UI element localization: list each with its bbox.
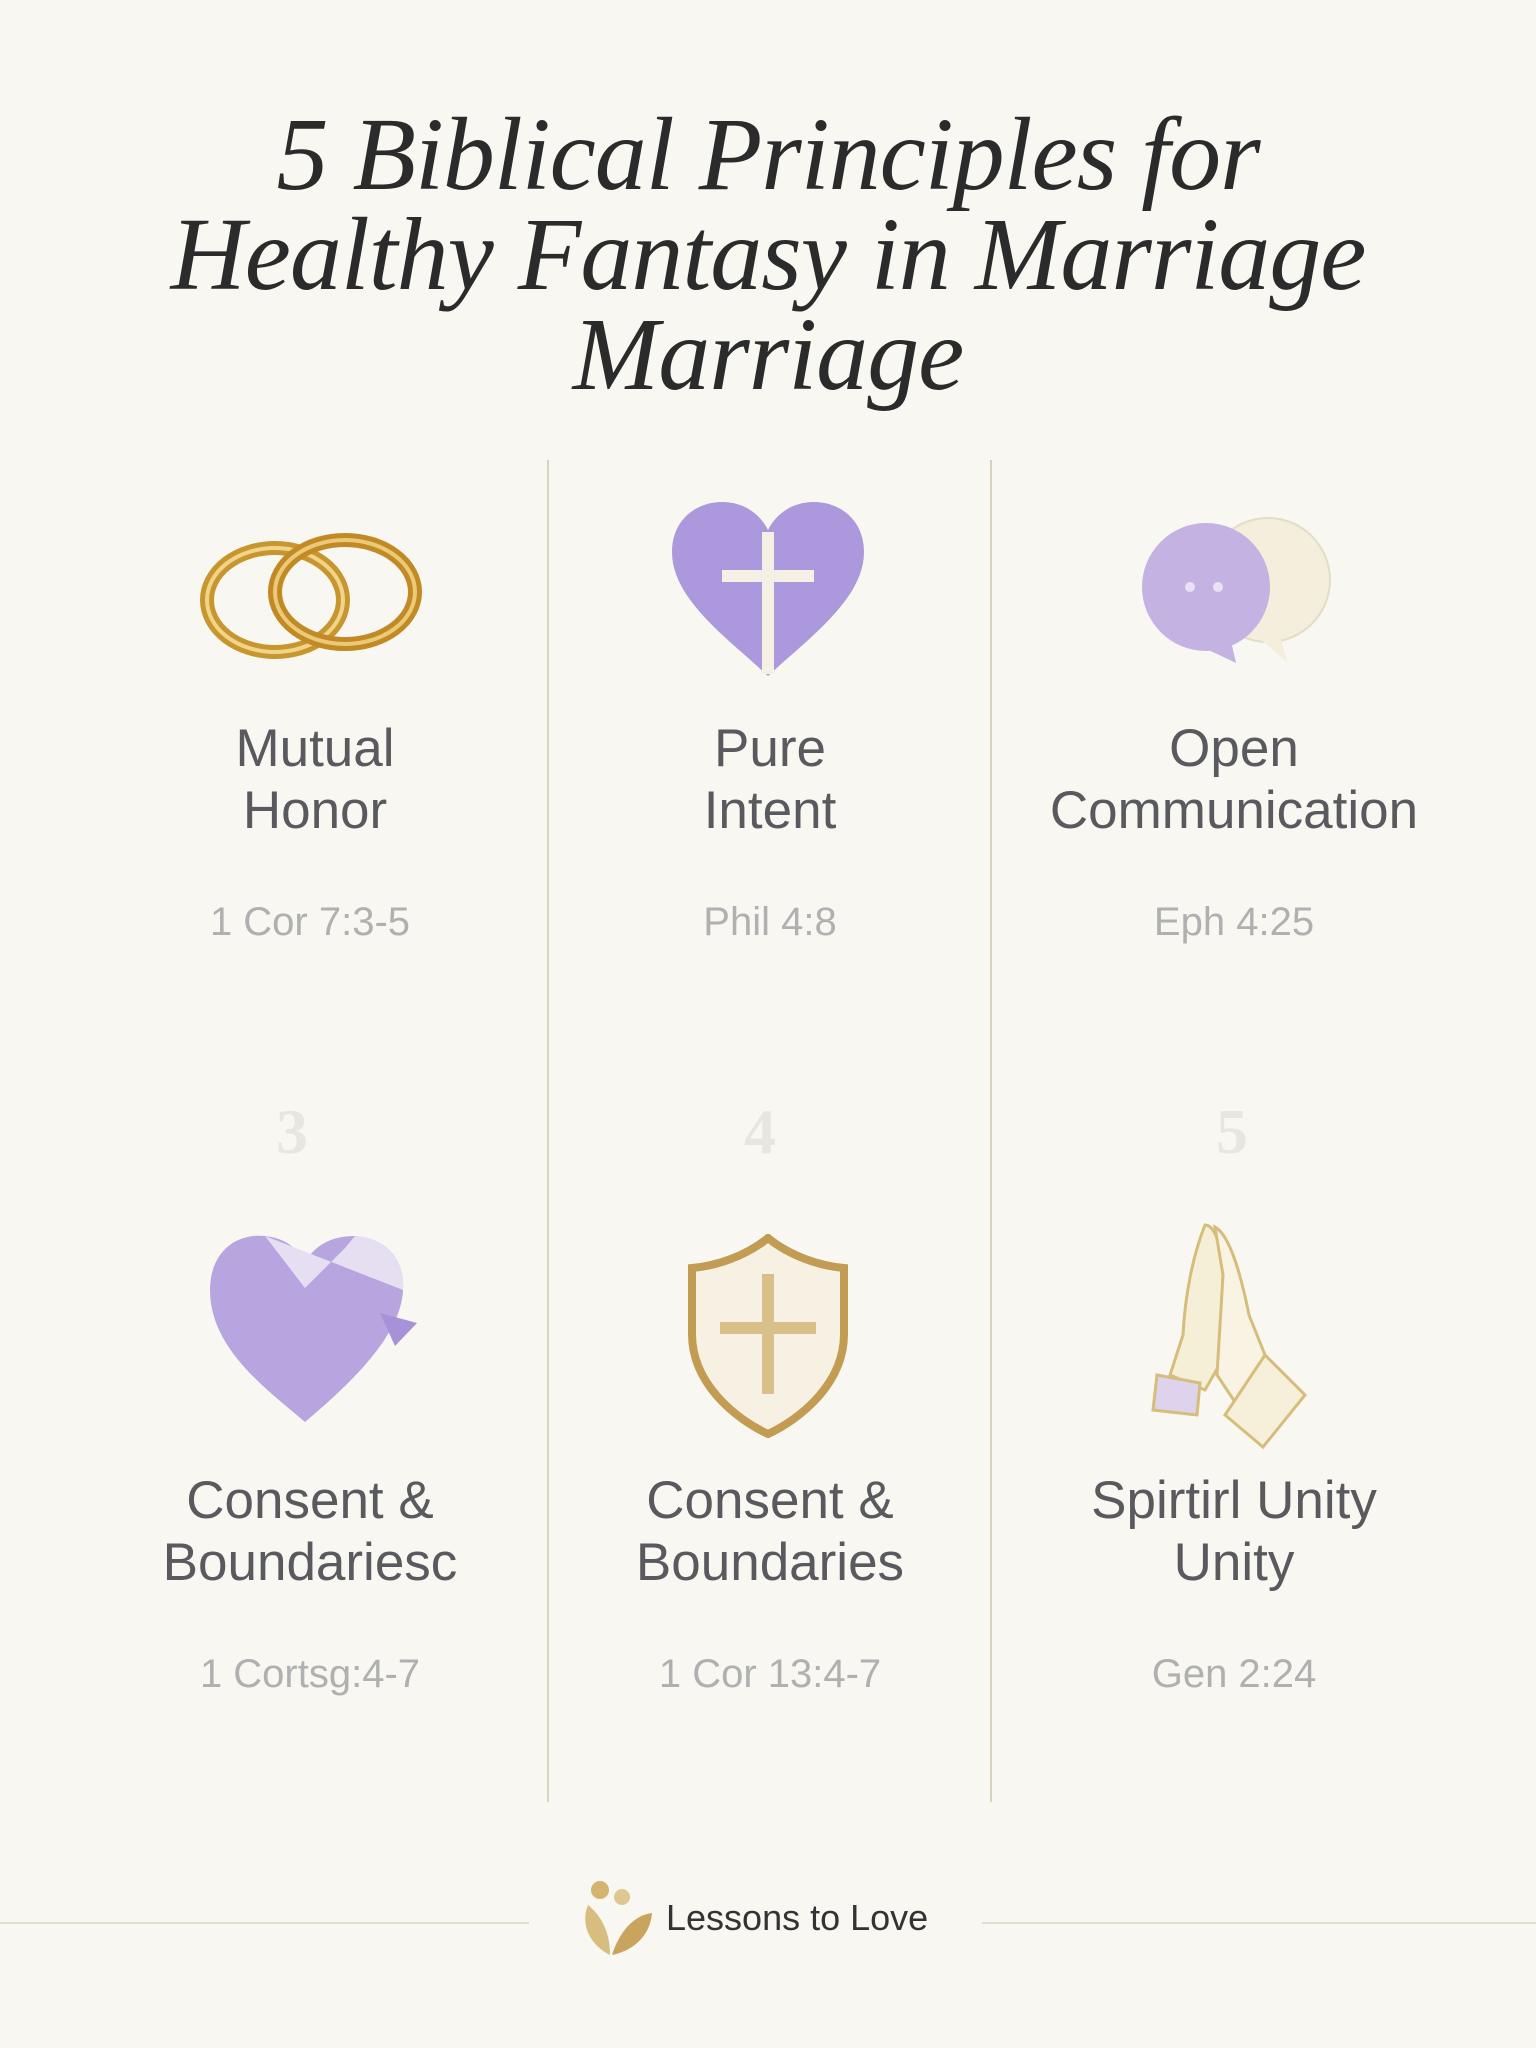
icon: praying hands bbox=[1151, 1224, 1307, 1449]
title: Marriage bbox=[573, 297, 963, 412]
label: Pure Intent bbox=[704, 719, 836, 840]
ref 2: Phil 4:8 bbox=[703, 900, 837, 944]
label: Consent & Boundaries: Boundaries bbox=[636, 1533, 904, 1592]
brand text: Lessons to Love bbox=[666, 1897, 928, 1938]
title: Healthy Fantasy in Marriage bbox=[171, 197, 1365, 312]
icon: wedding rings bbox=[200, 533, 422, 659]
number 3: 3 bbox=[276, 1096, 308, 1167]
label: Mutual Honor bbox=[235, 719, 395, 840]
icon: faceted heart bbox=[210, 1236, 417, 1422]
ref 3: Eph 4:25 bbox=[1154, 900, 1314, 944]
icon: speech bubbles bbox=[1142, 517, 1331, 663]
label: Open Communication: Open bbox=[1169, 719, 1299, 778]
number 5: 5 bbox=[1216, 1096, 1248, 1167]
label: Spiritual Unity: Unity bbox=[1174, 1533, 1294, 1592]
label: Consent & Boundariesc bbox=[163, 1471, 457, 1592]
title bbox=[170, 97, 1365, 412]
label: Pure Intent: Intent bbox=[704, 781, 836, 840]
label: Open Communication bbox=[1050, 719, 1418, 840]
label: Consent & Boundariesc: Consent & bbox=[186, 1471, 434, 1530]
label: Consent & Boundaries bbox=[636, 1471, 904, 1592]
label: Consent & Boundariesc: Boundariesc bbox=[163, 1533, 457, 1592]
label: Mutual Honor: Mutual bbox=[235, 719, 395, 778]
icon: logo leaves bbox=[585, 1881, 652, 1955]
ref 5: 1 Cor 13:4-7 bbox=[659, 1652, 881, 1696]
number 4: 4 bbox=[744, 1096, 776, 1167]
ref 1: 1 Cor 7:3-5 bbox=[210, 900, 410, 944]
title: 5 Biblical Principles for bbox=[276, 97, 1260, 212]
label: Spiritual Unity: Spirtirl Unity bbox=[1091, 1471, 1377, 1530]
icon: shield with cross bbox=[688, 1234, 848, 1438]
footer logo bbox=[585, 1881, 928, 1955]
label: Open Communication: Communication bbox=[1050, 781, 1418, 840]
label: Consent & Boundaries: Consent & bbox=[646, 1471, 894, 1530]
icon: heart with cross bbox=[672, 502, 864, 676]
label: Pure Intent: Pure bbox=[714, 719, 826, 778]
label: Spiritual Unity bbox=[1091, 1471, 1377, 1592]
ref 6: Gen 2:24 bbox=[1152, 1652, 1316, 1696]
ref 4: 1 Cortsg:4-7 bbox=[200, 1652, 420, 1696]
label: Mutual Honor: Honor bbox=[243, 781, 387, 840]
